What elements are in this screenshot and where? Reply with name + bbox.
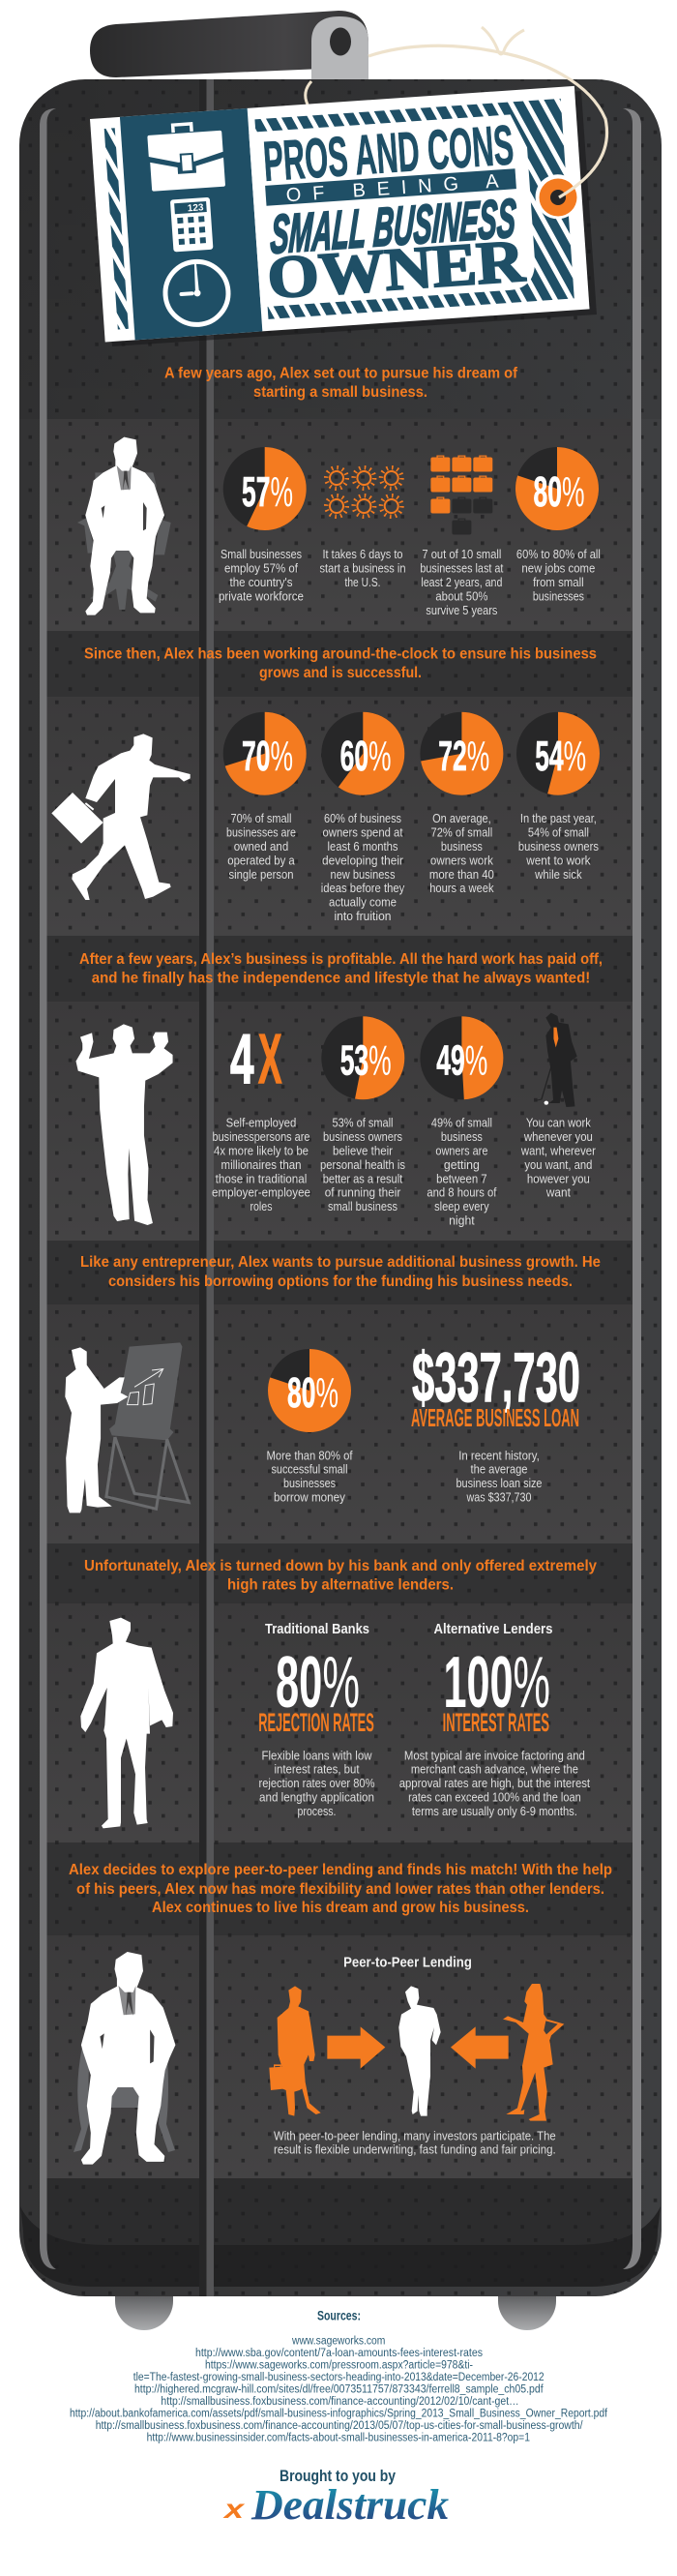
pie: 80% jobs: 80%	[534, 468, 584, 516]
text: seven of ten: businesses last at	[420, 561, 504, 575]
text: small business employment: the country's	[230, 576, 292, 589]
text: borrow money: successful small	[271, 1463, 348, 1477]
text: millionaires	[212, 1117, 310, 1213]
pie: 53%	[321, 1016, 404, 1099]
text: loan size	[456, 1449, 543, 1504]
text: six days	[319, 548, 406, 589]
text: traditional banks detail: process.	[298, 1805, 337, 1818]
text: millionaires: 4x more likely to be	[214, 1144, 309, 1157]
text: seven of ten	[420, 548, 504, 617]
text: personal health: small business	[328, 1200, 397, 1213]
text: personal health: personal health is	[320, 1158, 405, 1172]
text: work while sick: 54% of small	[528, 826, 589, 840]
text: six months developing: into fruition	[335, 910, 392, 923]
text: personal health: of running their	[325, 1186, 400, 1200]
text: personal health: better as a result	[323, 1172, 403, 1185]
text: six months developing: 60% of business	[324, 812, 401, 825]
stat: 80% rejection rates	[258, 1641, 374, 1737]
text: sleep: night	[449, 1213, 475, 1227]
sources heading: Sources:	[317, 2308, 361, 2322]
text: new jobs: new jobs come	[521, 561, 595, 575]
text: six days: the U.S.	[344, 576, 381, 589]
heading: peer-to-peer decision: Alex decides to explore peer-to-peer lending and finds his match! With the help	[69, 1862, 612, 1878]
heading: peer-to-peer decision: Alex continues to live his dream and grow his business.	[152, 1900, 529, 1916]
icon: calculator: 123	[187, 202, 204, 214]
stat: 80% rejection rates: 80%	[276, 1641, 360, 1722]
illustration: man with empty pockets	[80, 1618, 173, 1828]
text: owned and operated: operated by a	[227, 854, 295, 867]
text: seven of ten: about 50%	[435, 590, 487, 604]
text: alternative lenders detail: merchant cash advance, where the	[411, 1763, 578, 1777]
text: seven of ten: 7 out of 10 small	[422, 548, 501, 561]
pie: 80% jobs	[515, 447, 599, 530]
text: borrow money: businesses	[283, 1477, 336, 1490]
text: six months developing: ideas before they	[321, 882, 405, 895]
text: work whenever	[520, 1117, 596, 1200]
text: six months developing: developing their	[322, 854, 403, 867]
sources list: tle=The-fastest-growing-small-business-sectors-heading-into-2013&date=December-26-2012	[133, 2372, 545, 2383]
text: borrow money: borrow money	[274, 1490, 346, 1504]
text: loan size: the average	[470, 1463, 528, 1477]
text: work whenever: whenever you	[523, 1130, 593, 1144]
sources list: https://www.sageworks.com/pressroom.aspx?article=978&ti-	[205, 2360, 473, 2372]
pie: 60%: 60%	[340, 733, 392, 780]
heading: like any entrepreneur	[80, 1254, 601, 1290]
text: personal health: 53% of small	[333, 1117, 393, 1130]
text: forty hours	[429, 812, 494, 895]
text: traditional banks detail: interest rates, but	[275, 1763, 360, 1777]
text: traditional banks detail: and lengthy application	[259, 1790, 374, 1804]
text: small business employment: Small businesses	[221, 548, 302, 561]
text: millionaires: millionaires than	[221, 1158, 302, 1172]
pie: 60%	[321, 712, 404, 795]
sources list: http://highered.mcgraw-hill.com/sites/dl/free/0073511757/873343/ferrell8_sample_ch05.pdf	[134, 2384, 544, 2396]
heading: since then: Since then, Alex has been working around-the-clock to ensure his business	[84, 646, 597, 662]
text: alternative lenders detail: approval rates are high, but the interest	[399, 1777, 591, 1790]
luggage string behind tag	[306, 81, 311, 105]
illustration: walking man with briefcase	[51, 734, 191, 900]
text: sleep: owners are	[435, 1144, 487, 1157]
illustration: man with arms raised	[76, 1024, 173, 1225]
text: seven of ten: survive 5 years	[426, 604, 497, 617]
illustration: man presenting at flipchart	[65, 1342, 189, 1513]
text: alternative lenders detail	[399, 1749, 591, 1818]
text: sleep: between 7	[436, 1172, 487, 1185]
text: peer-to-peer summary: result is flexible underwriting, fast funding and fair pricing.	[274, 2142, 556, 2156]
arrow: left	[451, 2026, 509, 2069]
title tag	[90, 86, 597, 346]
heading: after a few years: After a few years, Alex’s business is profitable. All the hard work has paid off,	[79, 951, 603, 968]
stat: 4x: X	[258, 1021, 282, 1098]
text: sleep: business	[441, 1130, 483, 1144]
column heading: traditional banks: Traditional Banks	[265, 1622, 369, 1637]
title band: of being a: OF BEING A	[285, 170, 500, 206]
text: forty hours: owners work	[430, 854, 494, 867]
logo: dealstruck: Dealstruck	[250, 2481, 449, 2529]
text: new jobs: 60% to 80% of all	[516, 548, 601, 561]
text: owned and operated: 70% of small	[230, 812, 292, 825]
text: forty hours: 72% of small	[431, 826, 492, 840]
text: millionaires: those in traditional	[216, 1172, 307, 1185]
text: six months developing	[321, 812, 405, 923]
pie: 49%	[420, 1016, 503, 1099]
text: work while sick: while sick	[534, 868, 582, 882]
infographic canvas: INTEREST RATES	[443, 1708, 549, 1737]
text: six days: It takes 6 days to	[323, 548, 403, 561]
sources list: www.sageworks.com	[291, 2336, 385, 2348]
text: owned and operated: owned and	[234, 840, 288, 854]
text: work while sick	[518, 812, 599, 882]
intro heading: A few years ago, Alex set out to pursue his dream of	[164, 366, 518, 381]
text: work while sick: In the past year,	[520, 812, 597, 825]
tag eyelet and string	[368, 27, 607, 217]
figure: orange investor man	[269, 1986, 321, 2116]
heading: since then	[84, 646, 597, 681]
text: new jobs: from small	[533, 576, 584, 589]
text: six days: start a business in	[319, 561, 406, 575]
text: small business employment: employ 57% of	[224, 561, 298, 575]
icon: six days gears	[326, 467, 401, 517]
pie: 54%	[516, 712, 600, 795]
text: borrow money: More than 80% of	[267, 1449, 353, 1462]
text: six months developing: least 6 months	[327, 840, 398, 854]
text: sleep: sleep every	[434, 1200, 489, 1213]
text: alternative lenders detail: Most typical are invoice factoring and	[404, 1749, 585, 1762]
heading: unfortunately	[84, 1558, 597, 1593]
text: sleep	[427, 1117, 497, 1227]
text: work whenever: you want, and	[524, 1158, 592, 1172]
text: work while sick: business owners	[518, 840, 599, 854]
figure: white borrower	[398, 1986, 441, 2116]
arrow: right	[327, 2026, 385, 2069]
text: small business employment	[219, 548, 304, 604]
text: millionaires: roles	[250, 1200, 273, 1213]
text: personal health: business owners	[323, 1130, 402, 1144]
stat: 100% interest rates: 100%	[443, 1641, 550, 1722]
icon: seven of ten briefcases	[430, 455, 492, 534]
icon: briefcase	[147, 122, 225, 192]
pie: 72%	[420, 712, 503, 795]
logo: dealstruck: x	[221, 2494, 246, 2524]
text: owned and operated: single person	[228, 868, 294, 882]
text: work whenever: however you	[527, 1172, 590, 1185]
sources list: http://www.businessinsider.com/facts-about-small-businesses-in-america-2011-8?op=1	[147, 2433, 530, 2444]
pie: 57%	[223, 447, 307, 530]
text: millionaires: Self-employed	[226, 1117, 296, 1130]
icon: clock	[163, 259, 230, 327]
figure: orange investor woman	[503, 1984, 564, 2121]
text: sleep: getting	[444, 1158, 480, 1172]
icon: calculator	[170, 197, 213, 252]
text: six months developing: actually come	[329, 896, 397, 910]
column heading: peer-to-peer lending: Peer-to-Peer Lending	[343, 1956, 472, 1971]
stat: average loan	[411, 1339, 580, 1432]
sources list: http://smallbusiness.foxbusiness.com/finance-accounting/2012/02/10/cant-get…	[161, 2396, 519, 2408]
heading: after a few years: and he finally has the independence and lifestyle that he always wanted!	[92, 970, 590, 987]
illustration: seated man with chair	[77, 437, 171, 615]
text: work while sick: went to work	[525, 854, 591, 867]
heading: unfortunately: high rates by alternative lenders.	[227, 1577, 454, 1593]
credit line: Brought to you by	[280, 2467, 396, 2485]
intro heading	[164, 366, 518, 401]
pie: 70%: 70%	[242, 733, 293, 780]
infographic canvas: REJECTION RATES	[258, 1708, 374, 1737]
text: forty hours: On average,	[432, 812, 491, 825]
suitcase feet	[115, 2293, 556, 2330]
text: loan size: business loan size	[456, 1477, 543, 1490]
heading: unfortunately: Unfortunately, Alex is turned down by his bank and only offered extremely	[84, 1558, 597, 1574]
heading: like any entrepreneur: considers his borrowing options for the funding his business needs.	[108, 1273, 573, 1290]
text: alternative lenders detail: terms are usually only 6-9 months.	[412, 1805, 577, 1818]
text: work whenever: want	[545, 1186, 571, 1200]
text: alternative lenders detail: rates can exceed 100% and the loan	[408, 1790, 581, 1804]
text: owned and operated: businesses are	[226, 826, 296, 840]
pie: 80% borrow: 80%	[287, 1369, 338, 1417]
heading: after a few years	[79, 951, 603, 987]
stat: 4x: 4	[230, 1021, 253, 1098]
heading: since then: grows and is successful.	[259, 665, 422, 681]
text: personal health: believe their	[333, 1144, 393, 1157]
intro heading: starting a small business.	[253, 384, 427, 401]
sources list: http://about.bankofamerica.com/assets/pdf/small-business-infographics/Spring_2013_Small_Business_Owner_Report.pdf	[70, 2409, 608, 2420]
icon: golfer silhouette	[536, 1013, 577, 1107]
text: work whenever: want, wherever	[520, 1144, 596, 1157]
text: six months developing: new business	[331, 868, 395, 882]
sources list: http://www.sba.gov/content/7a-loan-amounts-fees-interest-rates	[195, 2348, 483, 2359]
text: forty hours: hours a week	[429, 882, 494, 895]
heading: peer-to-peer decision: of his peers, Alex now has more flexibility and lower rates than other lenders.	[76, 1881, 604, 1898]
heading: peer-to-peer decision	[69, 1862, 612, 1916]
pie: 49%: 49%	[436, 1037, 487, 1085]
text: traditional banks detail: Flexible loans with low	[261, 1749, 372, 1762]
title: owner: OWNER	[265, 228, 528, 312]
text: borrow money	[267, 1449, 353, 1504]
text: sleep: 49% of small	[431, 1117, 492, 1130]
diagram: investors and borrower	[269, 1984, 564, 2121]
column heading: alternative lenders: Alternative Lenders	[433, 1622, 553, 1637]
pie: 53%: 53%	[340, 1037, 392, 1085]
sources list: http://smallbusiness.foxbusiness.com/finance-accounting/2013/05/07/top-us-cities-for-small-business-growth/	[96, 2420, 583, 2432]
text: traditional banks detail: rejection rates over 80%	[259, 1777, 375, 1790]
pie: 57%: 57%	[242, 468, 293, 516]
pie: 80% borrow	[268, 1349, 351, 1432]
text: millionaires: businesspersons are	[213, 1130, 310, 1144]
tag shadow	[97, 91, 597, 346]
text: loan size: was $337,730	[466, 1490, 532, 1504]
text: work whenever: You can work	[526, 1117, 592, 1130]
text: loan size: In recent history,	[458, 1449, 540, 1462]
heading: like any entrepreneur: Like any entrepreneur, Alex wants to pursue additional business growth. He	[80, 1254, 601, 1271]
text: small business employment: private workforce	[219, 590, 304, 604]
text: millionaires: employer-employee	[212, 1186, 310, 1200]
text: new jobs: businesses	[533, 590, 584, 604]
stat: 100% interest rates	[443, 1641, 550, 1737]
text: peer-to-peer summary: With peer-to-peer lending, many investors participate. The	[274, 2130, 556, 2143]
pie: 72%: 72%	[438, 733, 489, 780]
text: sleep: and 8 hours of	[427, 1186, 497, 1200]
pie: 70%	[223, 712, 307, 795]
sources list	[70, 2336, 608, 2444]
text: six months developing: owners spend at	[323, 826, 403, 840]
suitcase handle	[90, 11, 368, 79]
text: forty hours: more than 40	[429, 868, 494, 882]
text: peer-to-peer summary	[274, 2130, 556, 2156]
text: new jobs	[516, 548, 601, 604]
illustration: seated man in armchair	[74, 1952, 175, 2165]
text: forty hours: business	[441, 840, 483, 854]
text: personal health	[320, 1117, 405, 1213]
text: traditional banks detail	[259, 1749, 375, 1818]
text: owned and operated	[226, 812, 296, 882]
text: seven of ten: least 2 years, and	[421, 576, 502, 589]
pie: 54%: 54%	[535, 733, 586, 780]
